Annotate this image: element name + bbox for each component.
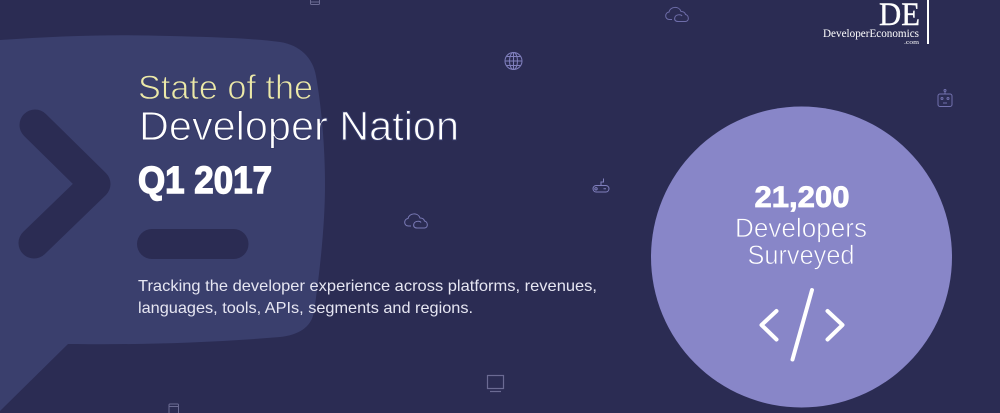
logo: DeveloperEconomics (823, 0, 929, 46)
title line: Q1 2017: Q1 2017 (138, 160, 272, 202)
icon: globe (505, 52, 522, 70)
stat number: 21,200 (754, 181, 850, 214)
icon: cloud top (666, 7, 688, 22)
title line: State of the: State of the (138, 69, 313, 107)
icon: monitor (488, 376, 504, 392)
logo rule (927, 0, 929, 44)
logo domain: .com (904, 39, 919, 46)
panel: speech bubble (0, 35, 325, 411)
panel: surveyed circle (651, 106, 952, 408)
stat: developers surveyed (735, 181, 867, 270)
logo wordmark: DeveloperEconomics (823, 28, 920, 40)
description line 2: languages, tools, APIs, segments and regions. (138, 300, 473, 317)
icon: chevron prompt (34, 125, 95, 243)
description line 1: Tracking the developer experience across platforms, revenues, (138, 278, 597, 295)
icon: game controller (593, 178, 609, 192)
icon: robot (938, 90, 952, 106)
stat label line 2: Surveyed (748, 240, 854, 270)
icon: cloud middle (405, 214, 427, 228)
title (138, 69, 459, 202)
text block: description (138, 278, 597, 317)
title line: Developer Nation: Developer Nation (139, 103, 459, 149)
icon: phone bottom (169, 404, 178, 413)
pill placeholder (137, 229, 248, 259)
icon: phone top (310, 0, 320, 4)
icon: code brackets (762, 290, 842, 360)
stat label line 1: Developers (735, 213, 867, 243)
